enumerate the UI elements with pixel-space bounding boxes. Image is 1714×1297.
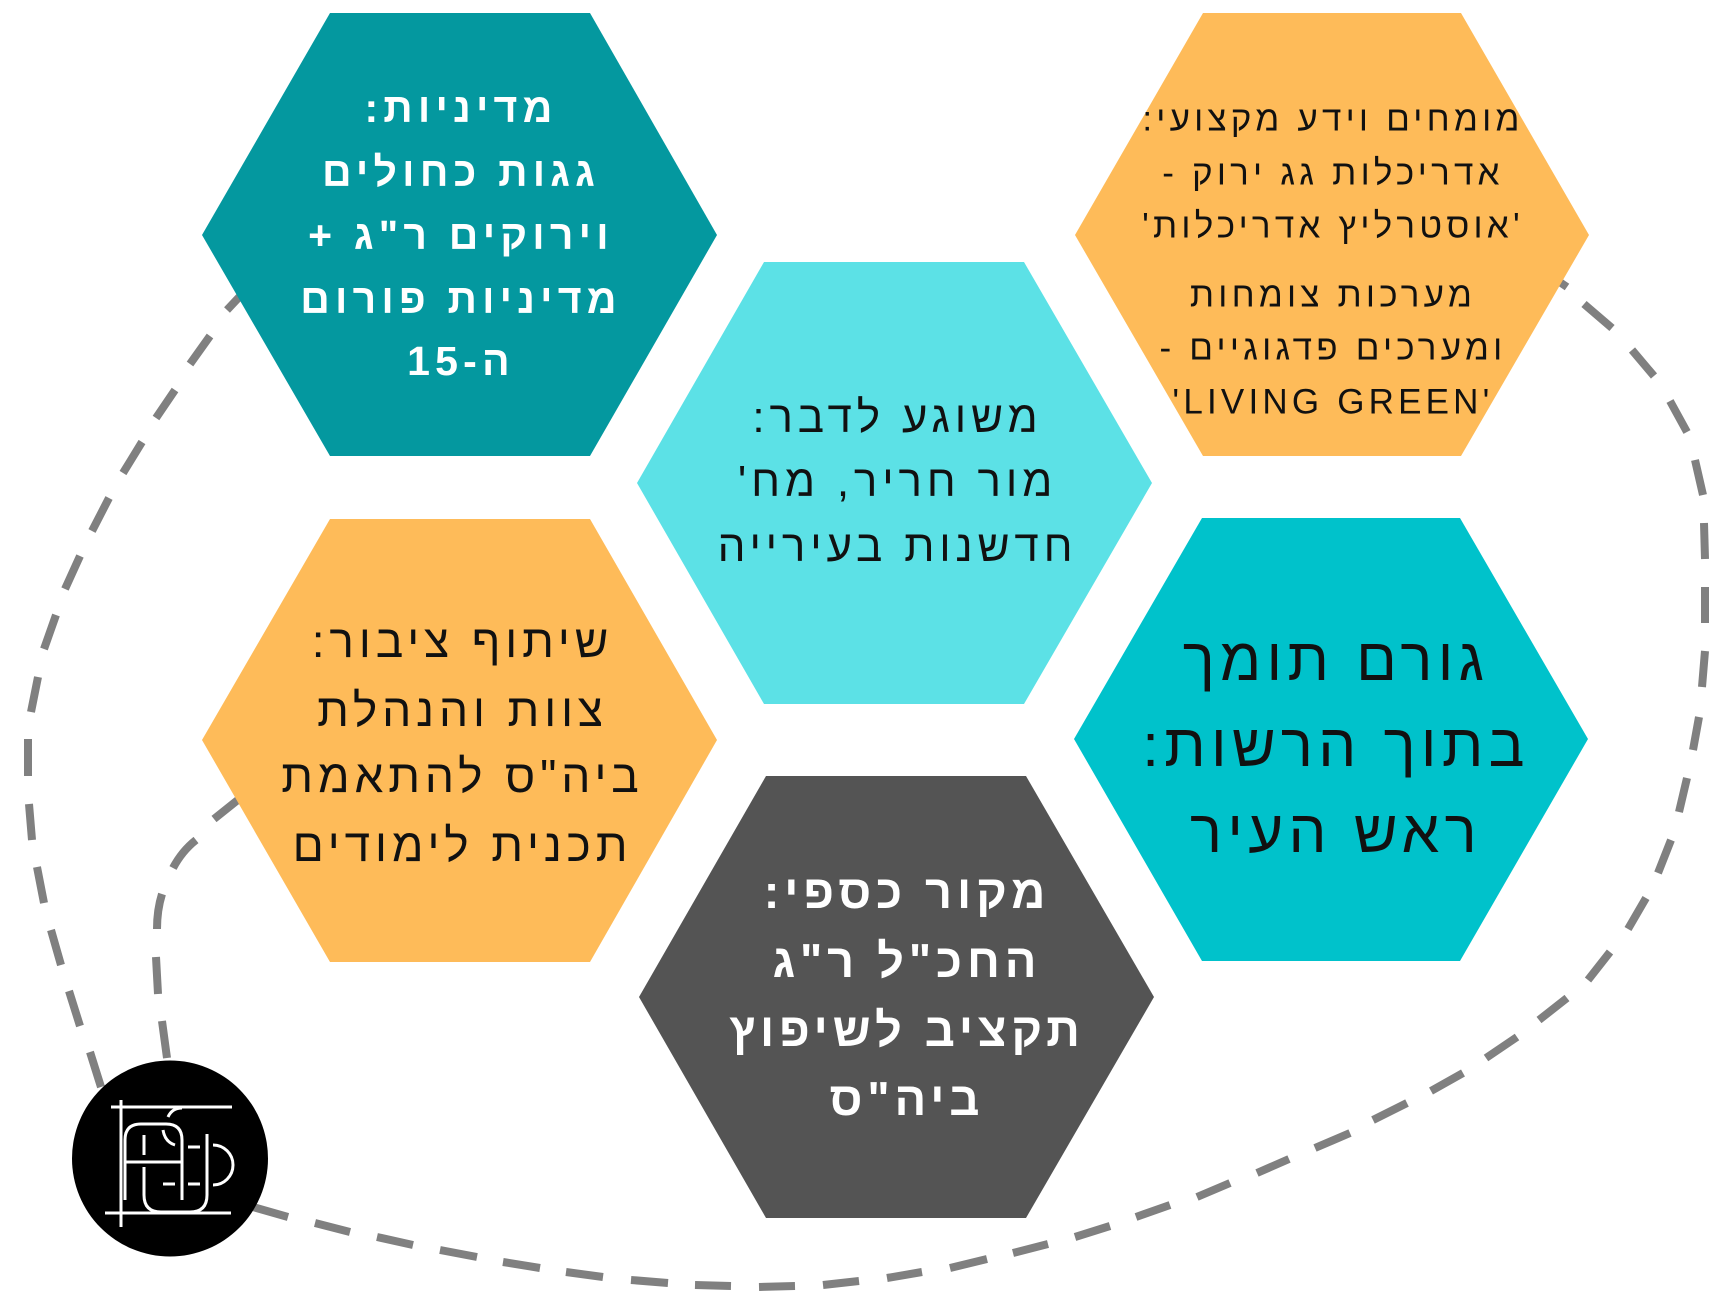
supporting authority text bbox=[1142, 626, 1530, 865]
funding source text: מקור כספי: bbox=[764, 865, 1050, 918]
hexagon: topic owner bbox=[637, 262, 1152, 704]
topic owner text: מור חריר, מח' bbox=[738, 457, 1057, 506]
experts text: 'LIVING GREEN' bbox=[1172, 382, 1494, 422]
hexagon shape bbox=[1074, 518, 1588, 961]
experts text: אדריכלות גג ירוק - bbox=[1162, 154, 1504, 192]
public participation text bbox=[281, 615, 644, 871]
hexagon shape bbox=[639, 776, 1154, 1218]
topic owner text: חדשנות בעירייה bbox=[718, 522, 1077, 571]
supporting authority text: גורם תומך bbox=[1183, 626, 1489, 693]
public participation text: תכנית לימודים bbox=[293, 819, 632, 871]
hexagon shape bbox=[202, 519, 717, 962]
public participation text: צוות והנהלת bbox=[317, 684, 608, 736]
hexagon shape bbox=[637, 262, 1152, 704]
policies text: וירוקים ר"ג + bbox=[308, 212, 614, 258]
dashed arc: left side bbox=[28, 293, 243, 1087]
supporting authority text: בתוך הרשות: bbox=[1142, 712, 1530, 779]
policies text: מדיניות פורום bbox=[300, 276, 622, 322]
policies text: מדיניות: bbox=[364, 85, 558, 131]
topic owner text bbox=[718, 393, 1077, 571]
dashed connector paths bbox=[28, 272, 1705, 1287]
policies text: ה-15 bbox=[407, 338, 515, 384]
public participation text: שיתוף ציבור: bbox=[312, 615, 613, 667]
experts text: מערכות צומחות bbox=[1190, 276, 1476, 314]
hexagon: supporting authority bbox=[1074, 518, 1588, 961]
funding source text bbox=[729, 865, 1085, 1125]
logo mark: mug and blueprint lines bbox=[105, 1100, 233, 1227]
policies text: גגות כחולים bbox=[322, 149, 600, 195]
funding source text: תקציב לשיפוץ bbox=[729, 1003, 1085, 1056]
experts text: מומחים וידע מקצועי: bbox=[1142, 100, 1524, 138]
hexagon: policies bbox=[202, 13, 717, 456]
dashed arc: right side bbox=[253, 272, 1705, 1287]
experts text bbox=[1142, 100, 1524, 422]
policies text bbox=[300, 85, 622, 384]
funding source text: החכ"ל ר"ג bbox=[773, 934, 1041, 987]
logo badge bbox=[72, 1060, 268, 1256]
experts text: 'אוסטרליץ אדריכלות' bbox=[1142, 206, 1524, 246]
experts text: ומערכים פדגוגיים - bbox=[1160, 328, 1506, 368]
topic owner text: משוגע לדבר: bbox=[752, 393, 1043, 442]
logo circle bbox=[72, 1060, 268, 1256]
dashed arc: inner left bbox=[156, 799, 239, 1058]
hexagon: experts bbox=[1075, 13, 1589, 456]
hexagon: public participation bbox=[202, 519, 717, 962]
hexagon: funding source bbox=[639, 776, 1154, 1218]
hexagon shape bbox=[202, 13, 717, 456]
funding source text: ביה"ס bbox=[830, 1072, 984, 1125]
hexagon shape bbox=[1075, 13, 1589, 456]
public participation text: ביה"ס להתאמת bbox=[281, 750, 644, 802]
supporting authority text: ראש העיר bbox=[1190, 798, 1482, 865]
